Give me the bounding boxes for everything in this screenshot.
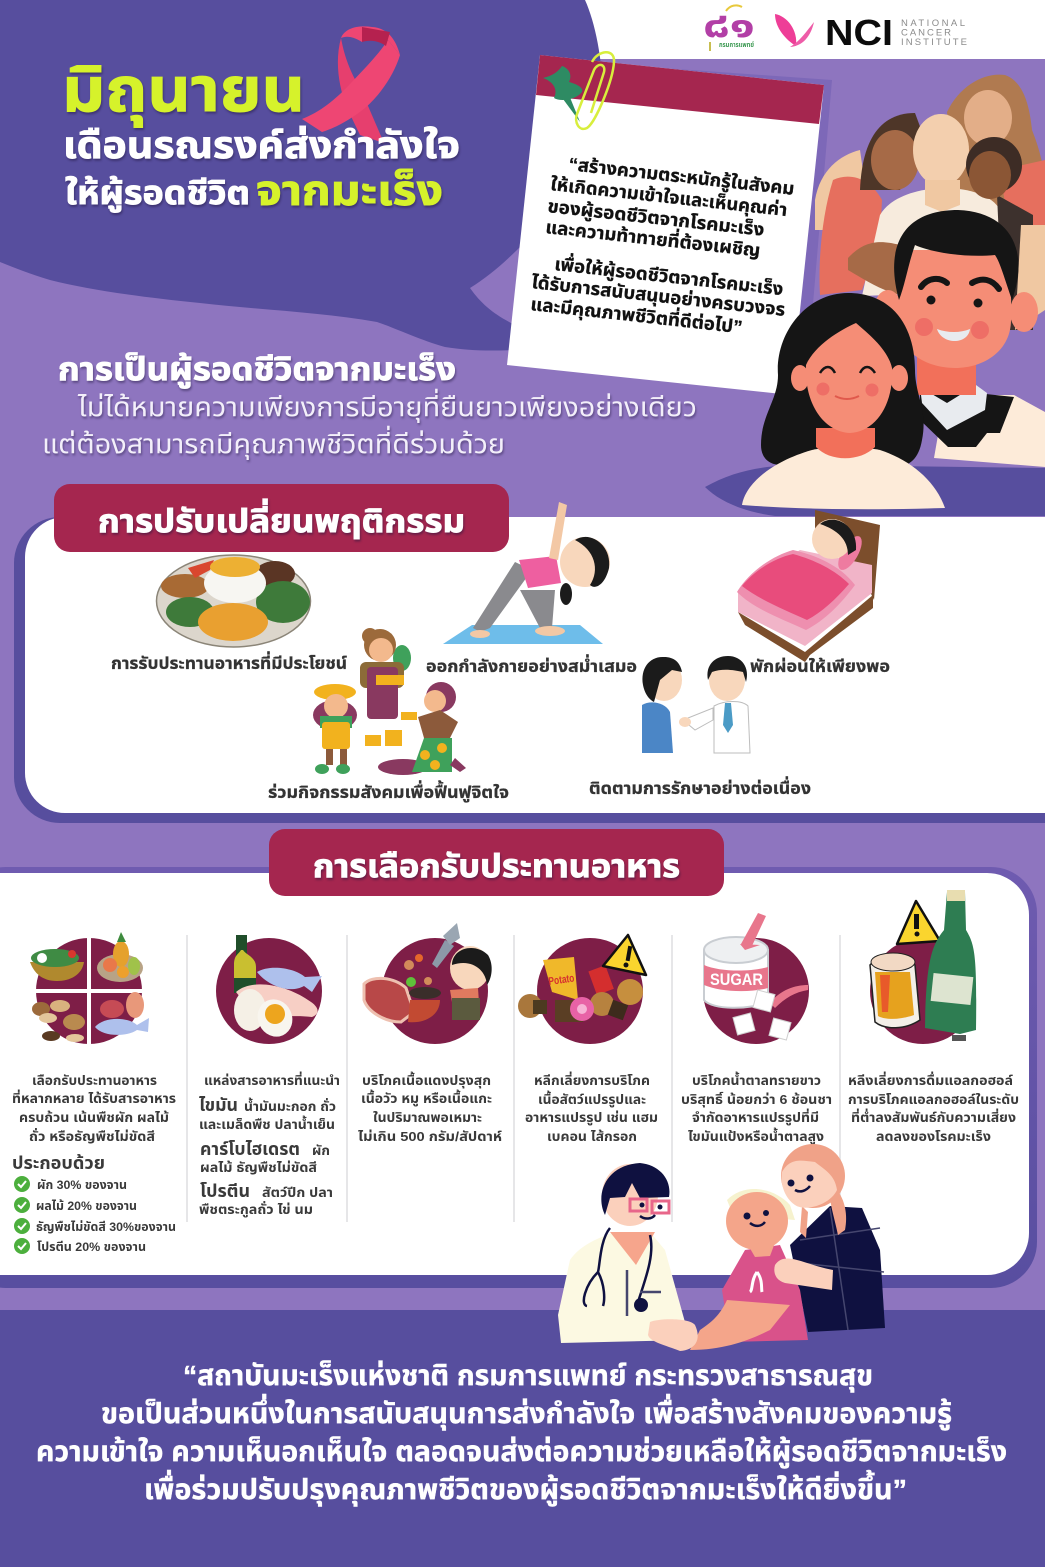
title [62,56,460,214]
footer quote: ขอเป็นส่วนหนึ่งในการสนับสนุนการส่งกำลังใจ เพื่อสร้างสังคมของความรู้ [101,1393,952,1431]
icon: community gardening [313,628,466,775]
label: follow up treatment: ติดตามการรักษาอย่างต่อเนื่อง [589,776,811,798]
column 5 text: ไขมันแป้งหรือน้ำตาลสูง [688,1127,824,1145]
column 2 text: แหล่งสารอาหารที่แนะนำ [204,1071,340,1088]
checklist: ธัญพืชไม่ขัดสี 30%ของจาน [36,1220,176,1234]
column 1 text: ถั่ว หรือธัญพืชไม่ขัดสี [29,1127,155,1144]
column 2 text [199,1071,340,1218]
icon: paper clip [576,52,614,129]
quote text: เพื่อให้ผู้รอดชีวิตจากโรคมะเร็ง [553,251,785,300]
column 6 text: การบริโภคแอลกอฮอล์ในระดับ [848,1092,1019,1107]
footer band [0,1310,1045,1567]
icon: processed foods: Potato [548,972,575,988]
column 3 text: เนื้อวัว หมู หรือเนื้อแกะ [361,1089,492,1107]
heading: food choices: การเลือกรับประทานอาหาร [313,848,680,884]
checklist [14,1176,176,1254]
quote text: ให้เกิดความเข้าใจและเห็นคุณค่า [549,174,788,221]
icon: doctor consultation [642,656,750,753]
title: เดือนรณรงค์ส่งกำลังใจ [63,125,460,166]
column 5 text [681,1071,832,1145]
footer quote: “สถาบันมะเร็งแห่งชาติ กรมการแพทย์ กระทรวงสาธารณสุข [183,1360,873,1392]
logo: NCI: INSTITUTE [901,37,967,48]
column 2 text: สัตว์ปีก ปลา [262,1185,333,1200]
panel: behaviour change [14,517,1045,823]
column 1 text: เลือกรับประทานอาหาร [32,1073,157,1088]
column 3 text: ในปริมาณพอเหมาะ [373,1110,482,1125]
column 1 text: ที่หลากหลาย ได้รับสารอาหาร [12,1089,176,1106]
pink ribbon [302,26,400,143]
supporting people group [815,75,1045,330]
icon: sugar [703,913,809,1044]
column 6 text [848,1071,1019,1144]
label: rest: พักผ่อนให้เพียงพอ [750,656,890,676]
logo: NCI: NCI [825,12,893,53]
column 3 text: บริโภคเนื้อแดงปรุงสุก [362,1071,491,1088]
doctor [558,1163,698,1351]
column 4 text: หลีกเลี่ยงการบริโภค [534,1071,650,1088]
column 3 text: ไม่เกิน 500 กรัม/สัปดาห์ [358,1129,502,1144]
survivor heading: แต่ต้องสามารถมีคุณภาพชีวิตที่ดีร่วมด้วย [42,425,505,460]
column 2 text: คาร์โบไฮเดรต [200,1139,300,1159]
column 6 text: หลีงเลี่ยงการดื่มแอลกอฮอล์ [848,1071,1013,1088]
icon: yoga [443,502,610,644]
quote text: “สร้างความตระหนักรู้ในสังคม [567,154,795,200]
quote text: และความท้าทายที่ต้องเผชิญ [545,214,762,261]
column 4 text: เนื้อสัตว์แปรรูปและ [538,1090,646,1108]
icon: green push pin [543,66,582,122]
icon: bed [737,510,880,662]
smiling woman [742,293,945,509]
column dividers [186,935,841,1222]
logo: department of medical services [703,4,755,51]
logo: NCI: CANCER [901,28,951,38]
quote text: และมีคุณภาพชีวิตที่ดีต่อไป” [529,291,744,338]
label: exercise: ออกกำลังกายอย่างสม่ำเสมอ [426,654,637,676]
icon: sugar: SUGAR [710,970,763,989]
title: ให้ผู้รอดชีวิต [65,174,250,213]
quote text [529,154,795,338]
column 6 text: ที่ต่ำลงสัมพันธ์กับความเสี่ยง [851,1108,1016,1125]
label: food: การรับประทานอาหารที่มีประโยชน์ [111,651,347,673]
logo: NCI [775,12,967,53]
column 1 text: ประกอบด้วย [12,1153,105,1173]
footer quote: เพื่อร่วมปรับปรุงคุณภาพชีวิตของผู้รอดชีวิตจากมะเร็งให้ดียิ่งขึ้น” [144,1469,907,1507]
checklist: ผัก 30% ของจาน [37,1178,127,1192]
column 2 text: พืชตระกูลถั่ว ไข่ นม [199,1200,313,1218]
column 5 text: จำกัดอาหารแปรรูปที่มี [692,1108,819,1126]
survivor heading [42,351,697,460]
icon: nutrient sources [216,935,322,1044]
quote text: ของผู้รอดชีวิตจากโรคมะเร็ง [546,196,765,241]
quote text: ได้รับการสนับสนุนอย่างครบวงจร [530,272,786,321]
footer quote: ความเข้าใจ ความเห็นอกเห็นใจ ตลอดจนส่งต่อความช่วยเหลือให้ผู้รอดชีวิตจากมะเร็ง [36,1436,1007,1469]
column 5 text: บริสุทธิ์ น้อยกว่า 6 ช้อนชา [681,1091,832,1107]
icon: food plate [156,555,310,647]
column 4 text: อาหารแปรรูป เช่น แฮม [525,1110,658,1126]
icon: food plate quadrants [30,932,149,1046]
checklist: ผลไม้ 20% ของจาน [36,1199,137,1213]
smiling man [874,210,1045,467]
footer quote [36,1360,1007,1507]
logo: NCI: NATIONAL [901,18,965,29]
label: social activities: ร่วมกิจกรรมสังคมเพื่อฟื้นฟูจิตใจ [268,780,509,803]
header speech bubble [0,0,603,351]
footing ellipse [705,465,1045,516]
column 2 text: ผลไม้ ธัญพืชไม่ขัดสี [200,1160,317,1175]
title: มิถุนายน [62,56,305,127]
column 2 text: น้ำมันมะกอก ถั่ว [244,1097,336,1114]
logo: department of medical services: ๘๑ [703,4,755,45]
column 4 text [525,1071,658,1144]
column 5 text: บริโภคน้ำตาลทรายขาว [692,1071,821,1088]
panel: food choices [0,867,1037,1288]
checklist: โปรตีน 20% ของจาน [37,1240,146,1254]
heading: behaviour change [54,484,509,552]
column 1 text [12,1073,176,1254]
column 2 text: ไขมัน [199,1095,238,1115]
heading: food choices [269,829,724,896]
icon: alcohol [854,890,976,1044]
note card [507,55,832,398]
column 2 text: ผัก [312,1143,330,1158]
survivor heading: ไม่ได้หมายความเพียงการมีอายุที่ยืนยาวเพียงอย่างเดียว [77,388,697,423]
logo: department of medical services: กรมการแพทย์ [719,41,754,49]
survivor heading: การเป็นผู้รอดชีวิตจากมะเร็ง [58,351,456,388]
title: จากมะเร็ง [256,167,443,214]
icon: processed foods [518,935,646,1044]
column 1 text: ครบถ้วน เน้นพืชผัก ผลไม้ [19,1110,169,1125]
doctor, patient and caregiver [558,1144,885,1351]
heading: behaviour change: การปรับเปลี่ยนพฤติกรรม [98,498,465,539]
column 4 text: เบคอน ไส้กรอก [547,1129,637,1144]
patient [690,1189,833,1350]
column 2 text: โปรตีน [200,1181,250,1201]
caregiver [781,1144,885,1332]
column 2 text: และเมล็ดพืช ปลาน้ำเย็น [199,1115,335,1132]
column 3 text [358,1071,502,1144]
icon: red meat cooking [364,923,492,1044]
column 6 text: ลดลงของโรคมะเร็ง [876,1129,991,1144]
